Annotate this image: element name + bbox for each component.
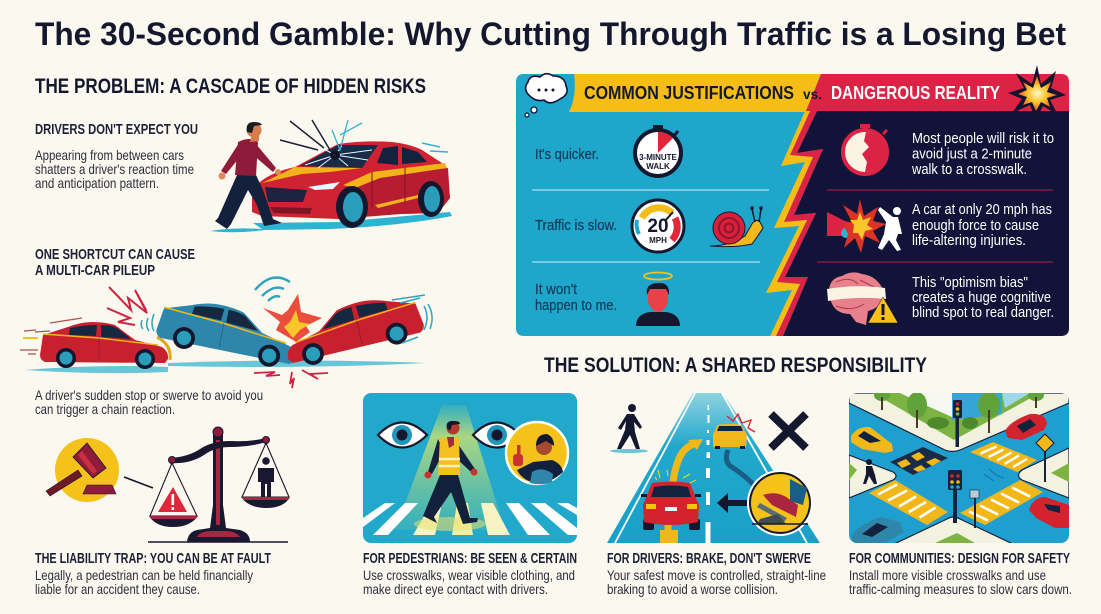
reality: 20 mph text: enough force to cause	[912, 217, 1039, 234]
icon: thought bubble	[525, 74, 567, 117]
text block: chain reaction	[35, 387, 263, 417]
icon: 3-minute walk stopwatch: 3-MINUTE	[639, 153, 678, 162]
justification: traffic is slow: Traffic is slow.	[535, 217, 617, 234]
text block: chain reaction: can trigger a chain reaction.	[35, 401, 175, 417]
text block: the liability trap: THE LIABILITY TRAP: YOU CAN BE AT FAULT	[35, 550, 271, 567]
blue left side	[516, 74, 830, 336]
text block: the liability trap: liable for an accident they cause.	[35, 581, 200, 597]
text block: multi-car pileup heading	[35, 246, 195, 279]
pointer line	[124, 477, 153, 488]
reality: most people text	[911, 130, 1054, 178]
reality: 20 mph text: A car at only 20 mph has	[912, 201, 1052, 218]
text block: for pedestrians	[363, 550, 577, 597]
reality: optimism bias text: This "optimism bias"	[912, 274, 1028, 291]
text block: for communities	[849, 550, 1072, 597]
header: dangerous reality: DANGEROUS REALITY	[831, 82, 1001, 103]
reality: 20 mph text	[912, 201, 1052, 249]
text block: for pedestrians: Use crosswalks, wear visible clothing, and	[363, 567, 575, 583]
right dividers	[817, 190, 1053, 262]
justification: it won't happen to me: happen to me.	[535, 297, 617, 314]
icon: 20 mph gauge: 20	[647, 216, 669, 237]
reality: most people text: walk to a crosswalk.	[911, 161, 1027, 178]
title: The 30-Second Gamble: Why Cutting Through Traffic is a Losing Bet	[35, 16, 1066, 52]
reality: most people text: Most people will risk it to	[912, 130, 1054, 147]
reality: blindfolded brain icon	[827, 272, 898, 325]
icon: 20 mph gauge	[632, 200, 684, 252]
lightning divider yellow	[766, 111, 813, 336]
header: common justifications: COMMON JUSTIFICATIONS	[584, 82, 794, 103]
panel: for pedestrians illustration	[363, 393, 577, 543]
text block: drivers don't expect you: shatters a driver's reaction time	[35, 161, 194, 177]
text block: multi-car pileup heading: ONE SHORTCUT CAN CAUSE	[35, 246, 195, 263]
text block: for pedestrians: make direct eye contact with drivers.	[363, 581, 548, 597]
heading: the solution: THE SOLUTION: A SHARED RESPONSIBILITY	[544, 354, 927, 377]
text block: the liability trap	[35, 550, 271, 597]
icon: 3-minute walk stopwatch	[635, 125, 681, 176]
left dividers	[532, 190, 769, 262]
text block: drivers don't expect you: DRIVERS DON'T EXPECT YOU	[35, 121, 198, 138]
text block: for communities: Install more visible crosswalks and use	[849, 567, 1046, 583]
text block: drivers don't expect you: Appearing from between cars	[35, 147, 184, 163]
reality: optimism bias text: creates a huge cognitive	[912, 289, 1051, 306]
text block: for drivers: braking to avoid a worse collision.	[607, 581, 778, 597]
text block: drivers don't expect you	[35, 121, 198, 191]
text block: for drivers: FOR DRIVERS: BRAKE, DON'T SWERVE	[607, 550, 811, 567]
panel: for communities illustration	[849, 389, 1069, 545]
panel: for drivers illustration	[607, 393, 820, 543]
heading: the problem: THE PROBLEM: A CASCADE OF HIDDEN RISKS	[35, 75, 426, 98]
reality: most people text: avoid just a 2-minute	[912, 146, 1032, 162]
illustration: multi-car pileup	[20, 278, 432, 388]
reality: 20 mph text: life-altering injuries.	[912, 232, 1026, 249]
icon: snail	[710, 206, 763, 247]
illustration: pedestrian stepping in front of red car	[210, 120, 452, 232]
icon: person with halo	[636, 272, 680, 326]
panel: justifications vs reality	[516, 65, 1069, 336]
justification: it's quicker: It's quicker.	[535, 146, 599, 163]
text block: for pedestrians: FOR PEDESTRIANS: BE SEEN & CERTAIN	[363, 550, 577, 567]
icon: explosion burst	[1008, 65, 1066, 120]
reality: optimism bias text: blind spot to real danger.	[912, 304, 1054, 321]
text block: multi-car pileup heading: A MULTI-CAR PILEUP	[35, 262, 155, 279]
reality: optimism bias text	[912, 274, 1054, 321]
navy right side	[783, 111, 1069, 336]
reality: stopwatch cracked	[843, 124, 887, 174]
justification: it won't happen to me	[535, 281, 617, 314]
header: vs: vs.	[803, 86, 822, 102]
justification: it won't happen to me: It won't	[535, 281, 578, 298]
reality: car impact icon	[827, 199, 902, 253]
illustration: scales of justice	[148, 427, 290, 542]
lightning divider red	[776, 111, 823, 336]
icon: 20 mph gauge: MPH	[649, 236, 667, 245]
yellow header band	[569, 74, 830, 112]
text block: for drivers: Your safest move is controlled, straight-line	[607, 567, 826, 583]
illustration: gavel	[46, 438, 119, 502]
red header band	[806, 74, 1069, 111]
text block: drivers don't expect you: and anticipation pattern.	[35, 175, 159, 191]
text block: chain reaction: A driver's sudden stop or swerve to avoid you	[35, 387, 263, 403]
text block: the liability trap: Legally, a pedestrian can be held financially	[35, 567, 253, 583]
text block: for drivers	[607, 550, 826, 597]
icon: 3-minute walk stopwatch: WALK	[646, 162, 670, 171]
